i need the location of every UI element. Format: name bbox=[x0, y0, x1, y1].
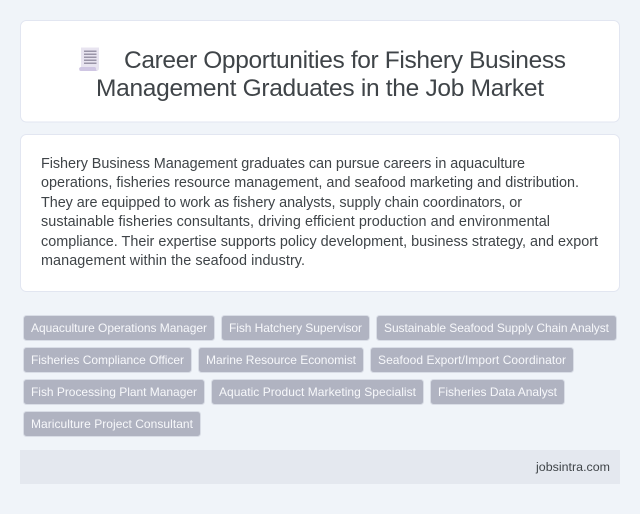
tag bbox=[370, 348, 574, 372]
title: Management Graduates in the Job Market bbox=[96, 75, 544, 102]
text block: description: management within the seafood industry. bbox=[41, 253, 305, 269]
icon: document scroll bbox=[79, 48, 99, 71]
text block: description: operations, fisheries resource management, and seafood marketing and distribution. bbox=[41, 175, 579, 191]
tag: Marine Resource Economist bbox=[206, 353, 357, 367]
text block: description: compliance. Their expertise supports policy development, business strategy, and export bbox=[41, 234, 598, 250]
tag bbox=[24, 412, 200, 436]
panel: title card bbox=[20, 20, 620, 122]
title bbox=[96, 47, 566, 102]
footer bbox=[20, 450, 620, 484]
tag: Fisheries Data Analyst bbox=[438, 385, 558, 399]
panel: description card bbox=[20, 134, 620, 292]
footer: jobsintra.com bbox=[535, 460, 610, 474]
tag: Mariculture Project Consultant bbox=[31, 417, 194, 431]
tag bbox=[430, 380, 564, 404]
tag: Aquaculture Operations Manager bbox=[31, 321, 207, 335]
tag bbox=[24, 348, 192, 372]
tag: Fisheries Compliance Officer bbox=[31, 353, 184, 367]
tag bbox=[222, 316, 370, 340]
tag: Fish Processing Plant Manager bbox=[31, 385, 197, 399]
tag: Sustainable Seafood Supply Chain Analyst bbox=[384, 321, 610, 335]
text block: description: They are equipped to work as fishery analysts, supply chain coordinators, or bbox=[41, 195, 522, 211]
tag: Seafood Export/Import Coordinator bbox=[378, 353, 566, 367]
tag: Fish Hatchery Supervisor bbox=[229, 321, 362, 335]
tag bbox=[212, 380, 424, 404]
tag bbox=[24, 380, 204, 404]
title: Career Opportunities for Fishery Business bbox=[124, 47, 566, 74]
tags: job titles bbox=[24, 316, 616, 436]
text block: description: sustainable fisheries consultants, driving efficient production and environmental bbox=[41, 214, 550, 230]
text block: description bbox=[41, 156, 598, 269]
text block: description: Fishery Business Management graduates can pursue careers in aquaculture bbox=[41, 156, 525, 172]
tag bbox=[24, 316, 214, 340]
tag bbox=[376, 316, 616, 340]
tag bbox=[198, 348, 364, 372]
tag: Aquatic Product Marketing Specialist bbox=[219, 385, 417, 399]
